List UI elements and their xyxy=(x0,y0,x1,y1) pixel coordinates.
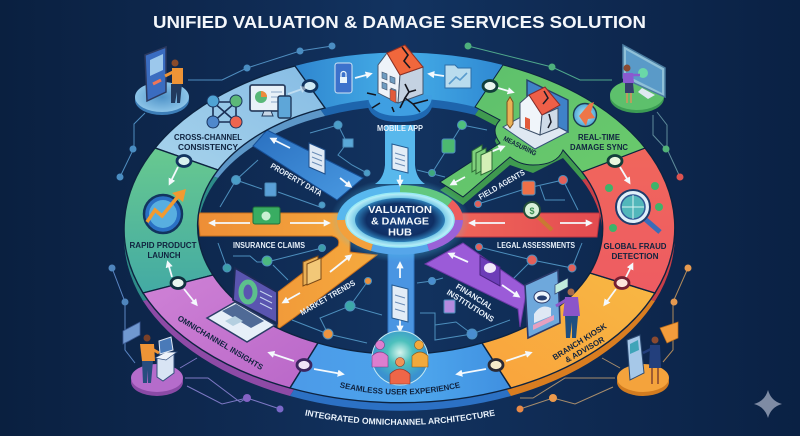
spoke: legal assessments xyxy=(452,213,600,237)
user pink xyxy=(372,340,388,367)
small house side xyxy=(540,108,558,135)
connector nodes xyxy=(171,80,629,370)
icon: group of users on globe xyxy=(372,331,428,385)
label: cross-channel consistency: CROSS-CHANNEL xyxy=(174,133,242,142)
laptop chart xyxy=(241,282,255,302)
icon: monitor and phone xyxy=(250,85,291,118)
label: rapid product launch xyxy=(130,241,197,260)
spoke: property data xyxy=(253,130,363,200)
segment: cross-channel consistency xyxy=(155,66,325,170)
icon: laptop insights xyxy=(207,268,277,342)
label: omnichannel insights: OMNICHANNEL INSIGHTS xyxy=(176,314,265,372)
icon: monitor platform top right xyxy=(610,45,665,113)
spoke: financial institutions xyxy=(425,243,527,327)
icon: magnifier on legal spoke: $ xyxy=(529,206,535,216)
laptop screen xyxy=(527,80,568,132)
icon: cash on insurance spoke xyxy=(253,207,280,224)
label: branch kiosk and advisor: BRANCH KIOSK xyxy=(551,322,609,362)
icon: fraud magnifier xyxy=(605,182,663,232)
icon: real-time globe xyxy=(574,102,596,126)
house roof xyxy=(387,45,423,75)
label: real-time damage sync: DAMAGE SYNC xyxy=(570,143,628,152)
outer connector circuits xyxy=(108,42,692,412)
icon: chat on financial spoke xyxy=(480,256,500,286)
icon: cracked house xyxy=(367,45,433,122)
small house door xyxy=(525,117,530,130)
inner circuits xyxy=(218,120,582,343)
hub rainbow ring xyxy=(341,189,459,251)
segment: rapid product launch xyxy=(124,148,218,293)
label: cross-channel consistency xyxy=(174,133,242,152)
person: advisor at robot tablet xyxy=(556,288,580,338)
house front wall xyxy=(378,53,400,103)
icon: mobile platform top left xyxy=(135,47,189,115)
hub label: VALUATION xyxy=(368,205,432,216)
title: UNIFIED VALUATION & DAMAGE SERVICES SOLUTION xyxy=(153,12,646,32)
small house cracks xyxy=(543,91,551,128)
house door xyxy=(390,89,396,103)
hub xyxy=(330,178,470,262)
user yellow xyxy=(412,340,428,367)
label: market trends: MARKET TRENDS xyxy=(299,278,357,317)
icon: robot tablet xyxy=(525,270,568,338)
spoke: field agents xyxy=(440,143,510,197)
spokes xyxy=(198,125,600,340)
small house walls xyxy=(520,95,542,135)
laptop keyboard xyxy=(222,304,264,328)
segment: seamless user experience xyxy=(290,343,511,403)
laptop base xyxy=(503,112,568,149)
hub inner ring xyxy=(346,193,454,247)
label: rapid product launch: RAPID PRODUCT xyxy=(130,241,197,250)
segment: real-time damage sync xyxy=(440,65,645,197)
label: financial institutions: FINANCIAL xyxy=(454,282,495,312)
icon: phone lock xyxy=(335,63,352,93)
house side wall xyxy=(398,67,423,103)
label: global fraud detection: GLOBAL FRAUD xyxy=(604,242,667,251)
icon: growth globe xyxy=(144,189,186,233)
label: cross-channel consistency: CONSISTENCY xyxy=(178,143,239,152)
label: global fraud detection xyxy=(604,242,667,261)
icon: document on property data spoke xyxy=(309,143,325,174)
segment: global fraud detection xyxy=(582,148,675,293)
label: property data: PROPERTY DATA xyxy=(269,161,324,198)
hub glow xyxy=(330,178,470,262)
hub label: & DAMAGE xyxy=(371,216,429,228)
users globe xyxy=(372,331,428,385)
ruler xyxy=(507,97,513,128)
label: insurance claims: INSURANCE CLAIMS xyxy=(233,241,306,250)
icon: measuring laptop and house xyxy=(503,80,568,149)
icon: document on user experience spoke xyxy=(392,285,408,322)
label: real-time damage sync: REAL-TIME xyxy=(578,133,621,142)
laptop lines xyxy=(260,291,272,309)
hub label xyxy=(368,205,432,238)
segment: omnichannel insights xyxy=(143,275,318,388)
house platform xyxy=(367,100,433,122)
label: branch kiosk and advisor: & ADVISOR xyxy=(563,335,606,365)
laptop trackpad xyxy=(225,316,243,326)
spoke: user experience xyxy=(388,250,414,340)
label: rapid product launch: LAUNCH xyxy=(148,251,181,260)
user orange xyxy=(390,358,410,384)
icon: document on mobile app spoke xyxy=(392,144,408,173)
icon: magnifier on legal spoke xyxy=(524,202,552,230)
hub core xyxy=(355,198,445,242)
house platform top xyxy=(368,95,432,116)
house cracks xyxy=(367,47,428,112)
small house roof xyxy=(529,87,560,115)
label: measuring: MEASURING xyxy=(502,136,538,158)
segment arrows xyxy=(168,74,632,374)
label: real-time damage sync xyxy=(570,133,628,152)
house windows and door xyxy=(382,72,396,103)
ring 3D rim xyxy=(124,61,675,411)
icon: kiosk platform bottom right xyxy=(617,322,678,396)
segment: branch kiosk and advisor xyxy=(482,273,655,388)
hub label: HUB xyxy=(388,228,412,238)
label: financial institutions: INSTITUTIONS xyxy=(445,288,496,324)
spoke: mobile app xyxy=(375,125,425,184)
label: mobile app: MOBILE APP xyxy=(377,124,424,133)
icon: network consistency xyxy=(207,95,242,128)
label: integrated omnichannel architecture: INTEGRATED OMNICHANNEL ARCHITECTURE xyxy=(305,410,495,425)
ring labels xyxy=(130,124,667,425)
laptop screen xyxy=(233,268,277,323)
label: field agents: FIELD AGENTS xyxy=(477,168,527,202)
label: seamless user experience: SEAMLESS USER EXPERIENCE xyxy=(340,382,460,394)
icon: folder xyxy=(445,65,471,88)
laptop base xyxy=(207,302,275,342)
icon: files on field agents spoke xyxy=(472,145,492,175)
spoke arrows xyxy=(211,139,590,330)
icon: files on market trends spoke xyxy=(303,256,321,286)
segment: mobile app xyxy=(295,53,503,108)
icon: kiosk platform bottom left xyxy=(123,322,183,396)
spoke: insurance claims and market trends xyxy=(198,213,377,329)
label: global fraud detection: DETECTION xyxy=(612,252,659,261)
label: legal assessments: LEGAL ASSESSMENTS xyxy=(497,241,576,250)
ring segments xyxy=(124,53,675,403)
icon: sparkle watermark xyxy=(754,390,782,418)
